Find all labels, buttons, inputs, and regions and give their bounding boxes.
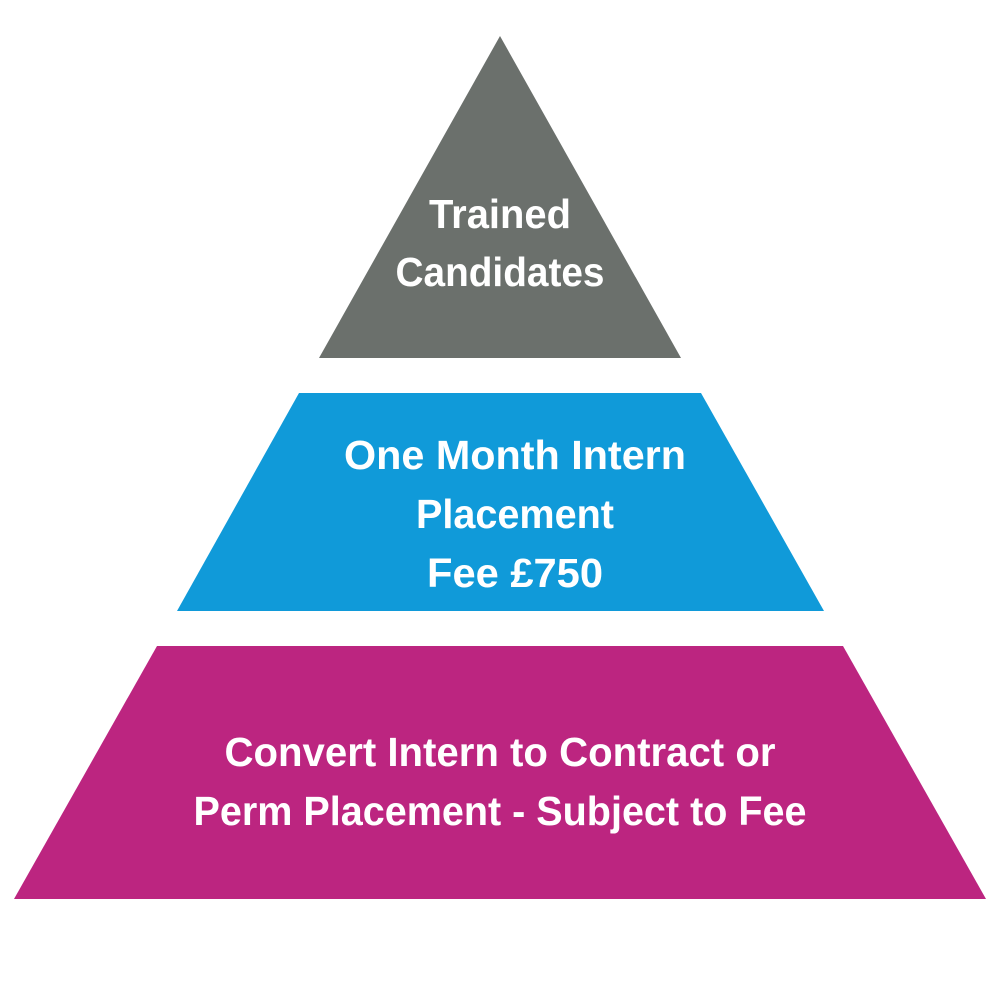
panel: bottom tier, convert intern (14, 646, 986, 899)
label: trained candidates: Candidates (396, 249, 604, 295)
label: one month intern placement and fee: One Month Intern (344, 432, 686, 478)
label: trained candidates (396, 191, 604, 295)
label: one month intern placement and fee (344, 432, 686, 596)
label: one month intern placement and fee: Placement (416, 491, 614, 537)
panel: top tier, trained candidates (319, 36, 681, 358)
label: trained candidates: Trained (429, 191, 571, 237)
label: convert intern to contract or perm placement (194, 729, 806, 834)
panel: middle tier, intern placement (177, 393, 824, 611)
label: one month intern placement and fee: Fee £750 (427, 550, 603, 596)
label: convert intern to contract or perm placement: Perm Placement - Subject to Fee (194, 788, 806, 834)
label: convert intern to contract or perm placement: Convert Intern to Contract or (224, 729, 776, 775)
